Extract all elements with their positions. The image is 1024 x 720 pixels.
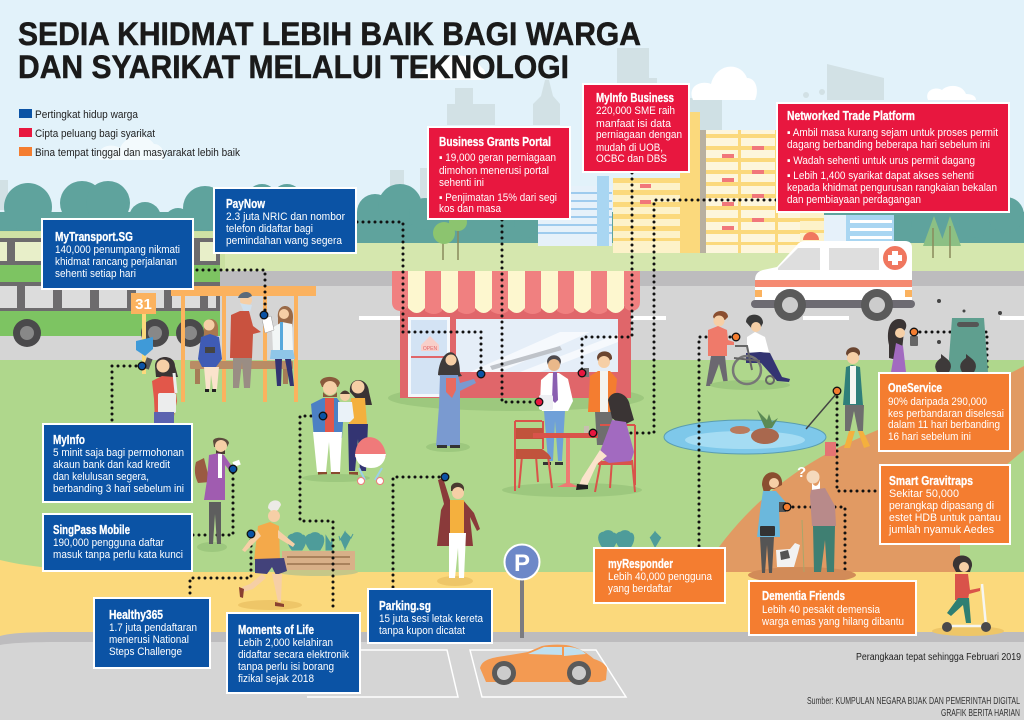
panel: MyInfo Business: mudah di UOB,	[596, 142, 663, 154]
panel: MyInfo	[43, 424, 192, 502]
tree band	[0, 181, 1024, 244]
legend	[19, 109, 240, 159]
table and chairs	[502, 421, 642, 497]
panel: Smart Gravitraps: Sekitar 50,000	[889, 488, 959, 500]
ambulance	[751, 232, 915, 321]
grass	[0, 360, 1024, 575]
panel: Smart Gravitraps: Smart Gravitraps	[889, 473, 973, 488]
person: mother and baby with pram	[302, 380, 386, 484]
panel: Smart Gravitraps: perangkap dipasang di	[889, 500, 994, 512]
panel: myResponder: yang berdaftar	[608, 583, 672, 595]
panel: Healthy365: menerusi National	[109, 634, 189, 646]
panel: Business Grants Portal: kos dan masa	[439, 203, 502, 215]
panel: Healthy365: Healthy365	[109, 607, 163, 622]
panel: PayNow	[214, 188, 356, 253]
panel: myResponder	[594, 548, 725, 603]
parking sign: P	[514, 550, 530, 577]
panel: Smart Gravitraps: estet HDB untuk pantau	[889, 512, 1001, 524]
person: man with phone raised	[437, 478, 480, 586]
panel: Networked Trade Platform: dan pembiayaan perdagangan	[787, 194, 921, 206]
panel: MyInfo Business: OCBC dan DBS	[596, 153, 667, 165]
panel: Parking.sg: 15 juta sesi letak kereta	[379, 613, 484, 625]
person: woman with red top and bag	[143, 357, 178, 424]
panel: SingPass Mobile	[43, 514, 192, 571]
panel: Business Grants Portal: Business Grants Portal	[439, 134, 551, 149]
parking bays	[307, 650, 626, 697]
panel: OneService: OneService	[888, 380, 942, 395]
panel: myResponder: Lebih 40,000 pengguna	[608, 571, 713, 583]
small roadside trees	[433, 213, 961, 260]
person: man with mosquito trap	[806, 347, 870, 456]
kerb and upper road	[0, 271, 1024, 286]
panel: Business Grants Portal: sehenti ini	[439, 177, 484, 189]
panel: MyTransport.SG: MyTransport.SG	[55, 229, 133, 244]
panel: MyInfo Business	[583, 84, 689, 172]
person: father	[311, 377, 344, 477]
orange footpath	[700, 366, 1024, 575]
panel: MyInfo: berbanding 3 hari sebelum ini	[53, 483, 184, 495]
lower road	[0, 632, 1024, 720]
panel: MyInfo Business: perniagaan dengan	[596, 129, 682, 141]
panel: Moments of Life	[227, 613, 360, 693]
person: woman with tablet	[262, 306, 295, 386]
shop: OPEN	[423, 346, 437, 352]
panel: Parking.sg: Parking.sg	[379, 598, 431, 613]
panel: Moments of Life: Lebih 2,000 kelahiran	[238, 637, 333, 649]
panel: OneService: 90% daripada 290,000	[888, 396, 987, 408]
panel: SingPass Mobile: masuk tanpa perlu kata kunci	[53, 549, 183, 561]
panel: MyInfo: MyInfo	[53, 432, 85, 447]
shop	[388, 271, 644, 411]
panel: MyInfo Business: 220,000 SME raih	[596, 105, 675, 117]
person: businessman with tie	[539, 355, 573, 465]
source credit	[807, 696, 1020, 719]
panel: Networked Trade Platform: ▪ Ambil masa kurang sejam untuk proses permit	[787, 127, 998, 139]
clouds	[99, 55, 976, 160]
panel: SingPass Mobile: 190,000 pengguna daftar	[53, 537, 164, 549]
panel: OneService: kes perbandaran diselesai	[888, 408, 1004, 420]
panel: Business Grants Portal	[428, 127, 570, 219]
title: DAN SYARIKAT MELALUI TEKNOLOGI	[18, 49, 569, 85]
panel: SingPass Mobile: SingPass Mobile	[53, 522, 130, 537]
panel: MyTransport.SG: sehenti setiap hari	[55, 268, 136, 280]
bus	[0, 232, 220, 347]
title	[18, 16, 641, 85]
left verge strip	[0, 231, 225, 271]
person: child on scooter	[932, 556, 1004, 636]
panel: MyInfo Business: MyInfo Business	[596, 90, 674, 105]
panel: PayNow: telefon didaftar bagi	[226, 223, 313, 235]
panel: MyInfo: dan kelulusan segera,	[53, 471, 149, 483]
panel: OneService: dalam 11 hari berbanding	[888, 419, 1000, 431]
wheelchair and patient	[710, 315, 790, 390]
panel: Dementia Friends: Lebih 40 pesakit demensia	[762, 604, 881, 616]
apartment blocks	[538, 112, 894, 253]
person: woman in purple dress with phone	[888, 319, 918, 372]
panel: Moments of Life: didaftar secara elektronik	[238, 649, 349, 661]
person: woman helping dementia patient	[748, 472, 856, 583]
panel: Moments of Life: fizikal sejak 2018	[238, 673, 314, 685]
panel: Networked Trade Platform: Networked Trade Platform	[787, 108, 915, 123]
panel: Dementia Friends: warga emas yang hilang dibantu	[761, 616, 904, 628]
panel: MyInfo Business: manfaat isi data	[596, 118, 672, 130]
panel: Parking.sg: tanpa kupon dicatat	[379, 625, 465, 637]
light green verge	[0, 243, 1024, 271]
legend: Cipta peluang bagi syarikat	[35, 128, 155, 140]
panel: Moments of Life: Moments of Life	[238, 622, 314, 637]
legend: Pertingkat hidup warga	[35, 109, 139, 121]
panel: OneService: 16 hari sebelum ini	[888, 431, 971, 443]
person: man with backpack	[195, 438, 241, 552]
title: SEDIA KHIDMAT LEBIH BAIK BAGI WARGA	[18, 16, 641, 52]
panel: Healthy365	[94, 598, 210, 668]
person: caregiver pushing wheelchair	[706, 311, 734, 386]
panel: PayNow: PayNow	[226, 196, 266, 211]
panel: PayNow: pemindahan wang segera	[226, 235, 343, 247]
person: seated woman in purple	[576, 393, 634, 490]
person: man in orange jacket	[584, 351, 617, 445]
sky	[0, 0, 1024, 245]
yellow pavement	[0, 560, 1024, 640]
person: elderly man and dog: ?	[797, 464, 806, 481]
panel: MyInfo: akaun bank dan kad kredit	[53, 459, 170, 471]
panel: myResponder: myResponder	[608, 556, 673, 571]
planters	[278, 531, 661, 576]
parking sign	[504, 544, 540, 638]
panel: OneService	[879, 373, 1010, 451]
person: elderly man and dog	[776, 464, 836, 572]
person: seated woman	[198, 319, 222, 392]
panel: Networked Trade Platform: ▪ Lebih 1,400 syarikat dapat akses sehenti	[787, 170, 974, 182]
panel: Networked Trade Platform: ▪ Wadah sehenti untuk urus permit dagang	[787, 155, 975, 167]
pond	[664, 410, 826, 454]
panel: Healthy365: 1.7 juta pendaftaran	[109, 622, 197, 634]
panel: MyTransport.SG: 140,000 penumpang nikmati	[55, 244, 180, 256]
panel: Dementia Friends: Dementia Friends	[762, 588, 845, 603]
person: woman in hijab	[426, 352, 476, 452]
panel: Parking.sg	[368, 589, 492, 643]
legend: Bina tempat tinggal dan masyarakat lebih baik	[35, 147, 240, 159]
connector end markers	[138, 311, 918, 538]
person: elderly jogger	[238, 500, 302, 610]
panel: Moments of Life: tanpa perlu isi borang	[238, 661, 334, 673]
rubbish bin and bags	[935, 299, 1002, 372]
panel: Business Grants Portal: ▪ Penjimatan 15% dari segi	[439, 192, 557, 204]
panel: Smart Gravitraps: jumlah nyamuk Aedes	[888, 524, 994, 536]
panel: Healthy365: Steps Challenge	[109, 646, 182, 658]
panel: Networked Trade Platform: dagang berbanding beberapa hari sebelum ini	[787, 139, 990, 151]
panel: MyTransport.SG	[42, 219, 193, 289]
panel: Networked Trade Platform	[777, 103, 1009, 212]
panel: Business Grants Portal: ▪ 19,000 geran perniagaan	[439, 152, 556, 164]
bus stop sign 31: 31	[135, 296, 152, 313]
panel: MyInfo: 5 minit saja bagi permohonan	[53, 447, 184, 459]
panel: Business Grants Portal: dimohon menerusi portal	[439, 165, 549, 177]
faded skyline	[0, 48, 884, 220]
bus shelter	[171, 286, 316, 402]
dotted connector lines	[112, 173, 987, 612]
panel: Networked Trade Platform: kepada khidmat pengurusan rangkaian bekalan	[787, 182, 997, 194]
panel: MyTransport.SG: khidmat rancang perjalanan	[55, 256, 177, 268]
panel: PayNow: 2.3 juta NRIC dan nombor	[226, 211, 345, 223]
awning	[392, 271, 640, 314]
car	[480, 645, 607, 685]
panel: Smart Gravitraps	[880, 465, 1010, 544]
bus stop sign 31	[131, 293, 156, 374]
panel: Dementia Friends	[749, 581, 916, 635]
person: elderly man in red coat	[230, 292, 261, 388]
